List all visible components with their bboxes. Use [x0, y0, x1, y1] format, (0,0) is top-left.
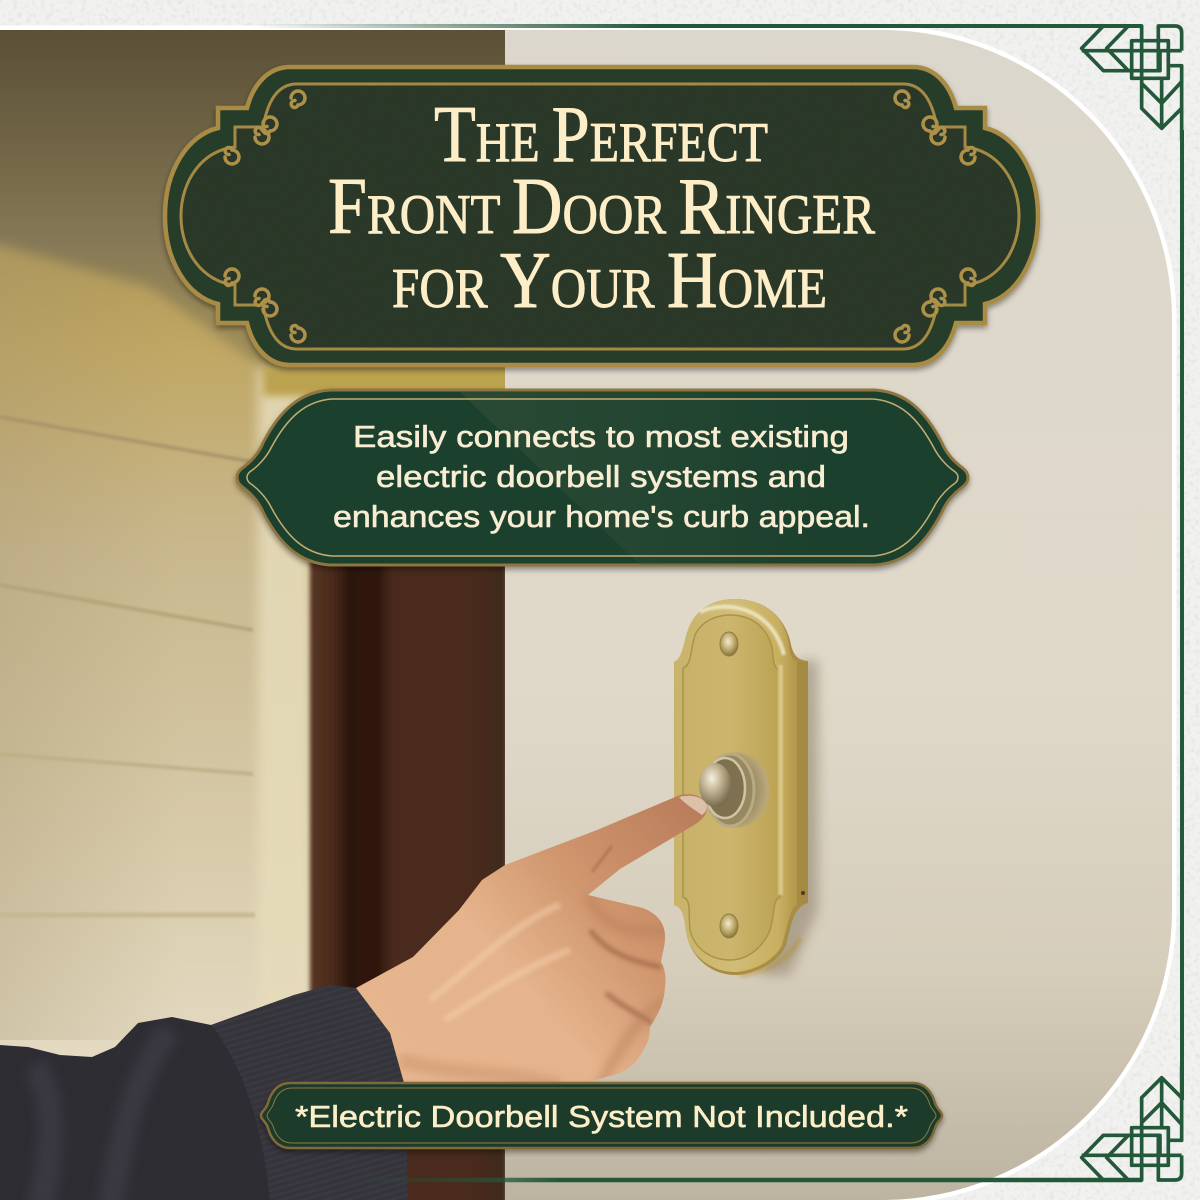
top screw [720, 632, 738, 656]
plaque body [261, 1083, 942, 1148]
doorbell shadow [760, 660, 818, 975]
frame line: top [250, 24, 1142, 28]
description text: enhances your home's curb appeal. [333, 499, 870, 534]
hand pressing the button [356, 794, 707, 1090]
title plaque [165, 67, 1038, 365]
push button [699, 753, 769, 827]
plaque body with gold rim [165, 67, 1038, 365]
bottom screw [720, 914, 738, 938]
diagonal sheen [460, 392, 786, 565]
icon: bottom right corner ornament [1060, 1066, 1182, 1180]
wall stain below plate [740, 938, 800, 975]
leather grain [181, 84, 1019, 349]
inner panel outline [181, 84, 1019, 349]
sleeve [0, 985, 408, 1200]
brass doorbell plate [674, 599, 808, 975]
description text [333, 419, 870, 534]
icon: top right corner ornament [1060, 26, 1182, 140]
gold scroll ornaments [225, 91, 975, 342]
inner gold outline [267, 1088, 936, 1143]
frame line: right [1180, 130, 1184, 1100]
fingernail [679, 796, 707, 815]
title text [328, 91, 876, 325]
description plaque [237, 390, 980, 565]
plaque body [237, 390, 968, 565]
description text: electric doorbell systems and [376, 459, 826, 494]
title text: THE PERFECT [434, 91, 768, 179]
frame line: bottom [350, 1178, 1142, 1182]
inner gold outline [247, 399, 958, 556]
description text: Easily connects to most existing [353, 419, 849, 454]
title text: FRONT DOOR RINGER [328, 163, 876, 251]
cream wall [505, 30, 1172, 1200]
disclaimer plaque [261, 1083, 942, 1148]
title text: FOR YOUR HOME [392, 237, 827, 325]
blurred house siding and soffit [0, 10, 525, 1200]
disclaimer text: *Electric Doorbell System Not Included.* [295, 1099, 908, 1134]
